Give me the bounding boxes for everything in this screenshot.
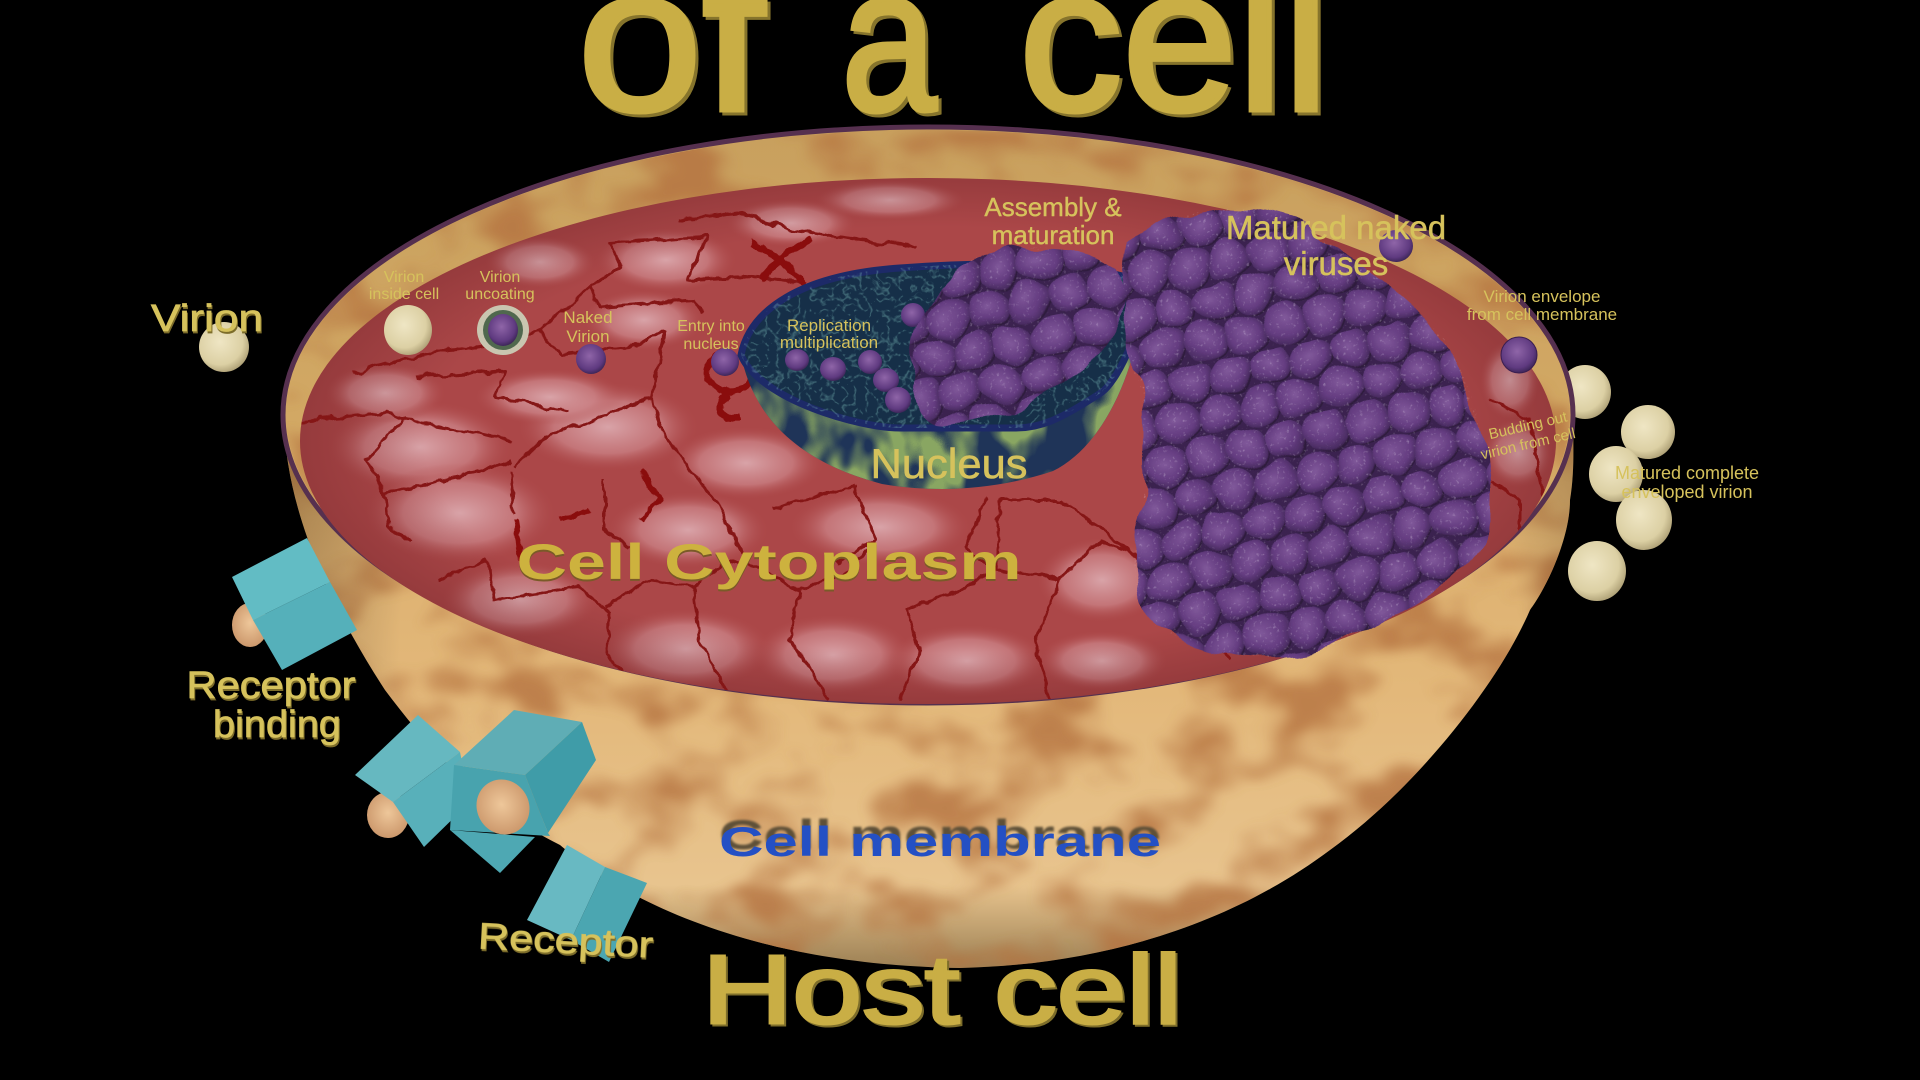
enveloped virion at membrane xyxy=(1501,337,1537,373)
free virion xyxy=(199,322,249,372)
receptor 1 xyxy=(232,538,357,670)
label: Receptor binding: Receptor xyxy=(186,665,356,707)
matured virus mass xyxy=(1121,209,1489,657)
label: Assembly & maturation: maturation xyxy=(992,220,1114,250)
label: Entry into nucleus: Entry into xyxy=(677,318,745,335)
label: Nucleus: Nucleus xyxy=(870,440,1028,487)
label: Budding out virion from cell: Budding out xyxy=(1487,408,1570,443)
nucleus xyxy=(741,264,1145,489)
label: Naked Virion: Naked xyxy=(563,308,613,327)
cytoplasm pale cells xyxy=(325,180,1553,697)
label: Receptor: Receptor xyxy=(477,915,654,966)
naked virion xyxy=(576,344,606,374)
receptor 4 xyxy=(527,845,647,962)
label: Virion uncoating: uncoating xyxy=(465,286,535,303)
cell cytoplasm surface xyxy=(290,170,1570,710)
label: Replication multiplication: multiplication xyxy=(780,333,878,352)
cytoplasm vignette xyxy=(290,170,1570,710)
label: Virion envelope from cell membrane: Virion envelope xyxy=(1484,287,1600,306)
receptor 2 xyxy=(355,715,470,847)
title xyxy=(578,0,1329,154)
virion inside cell xyxy=(384,305,432,355)
label: Naked Virion: Virion xyxy=(566,327,610,346)
label: Receptor binding: binding xyxy=(213,704,341,746)
virions replicating in nucleus xyxy=(785,303,925,413)
nucleus shell xyxy=(741,280,1145,489)
bound virion xyxy=(466,770,540,844)
label: Host cell: Host cell xyxy=(702,935,1182,1044)
inner wall and rim xyxy=(283,127,1573,703)
label: Entry into nucleus: nucleus xyxy=(683,336,739,353)
label: Matured complete enveloped virion: Matured complete xyxy=(1615,463,1759,483)
host cell membrane bowl xyxy=(284,415,1573,968)
label: Virion envelope from cell membrane: from cell membrane xyxy=(1467,305,1617,324)
cytoplasm cracks xyxy=(300,213,1545,700)
virion entering nucleus xyxy=(711,348,739,376)
nucleus interior xyxy=(741,264,1142,428)
label: Matured complete enveloped virion: enveloped virion xyxy=(1621,482,1753,502)
label: Virion inside cell: Virion xyxy=(384,269,424,286)
virions behind receptors xyxy=(232,603,409,838)
assembling virus mass in nucleus xyxy=(912,247,1122,425)
label: Virion: Virion xyxy=(151,298,263,340)
label: Budding out virion from cell: virion from cell xyxy=(1479,425,1577,463)
exiting virions xyxy=(1559,365,1675,601)
naked virus on rim xyxy=(1379,230,1413,262)
label: Assembly & maturation: Assembly & xyxy=(984,192,1122,222)
label: Matured naked viruses: Matured naked xyxy=(1226,209,1446,246)
label: Virion inside cell: inside cell xyxy=(369,286,439,303)
virion uncoating xyxy=(477,305,529,355)
label: Replication multiplication: Replication xyxy=(787,316,871,335)
label: Cell membrane: Cell membrane xyxy=(719,818,1161,865)
label: Cell Cytoplasm: Cell Cytoplasm xyxy=(516,534,1022,590)
label: Matured naked viruses: viruses xyxy=(1284,245,1388,282)
label: Virion uncoating: Virion xyxy=(480,269,520,286)
receptor 3 with bound virion xyxy=(450,710,596,873)
